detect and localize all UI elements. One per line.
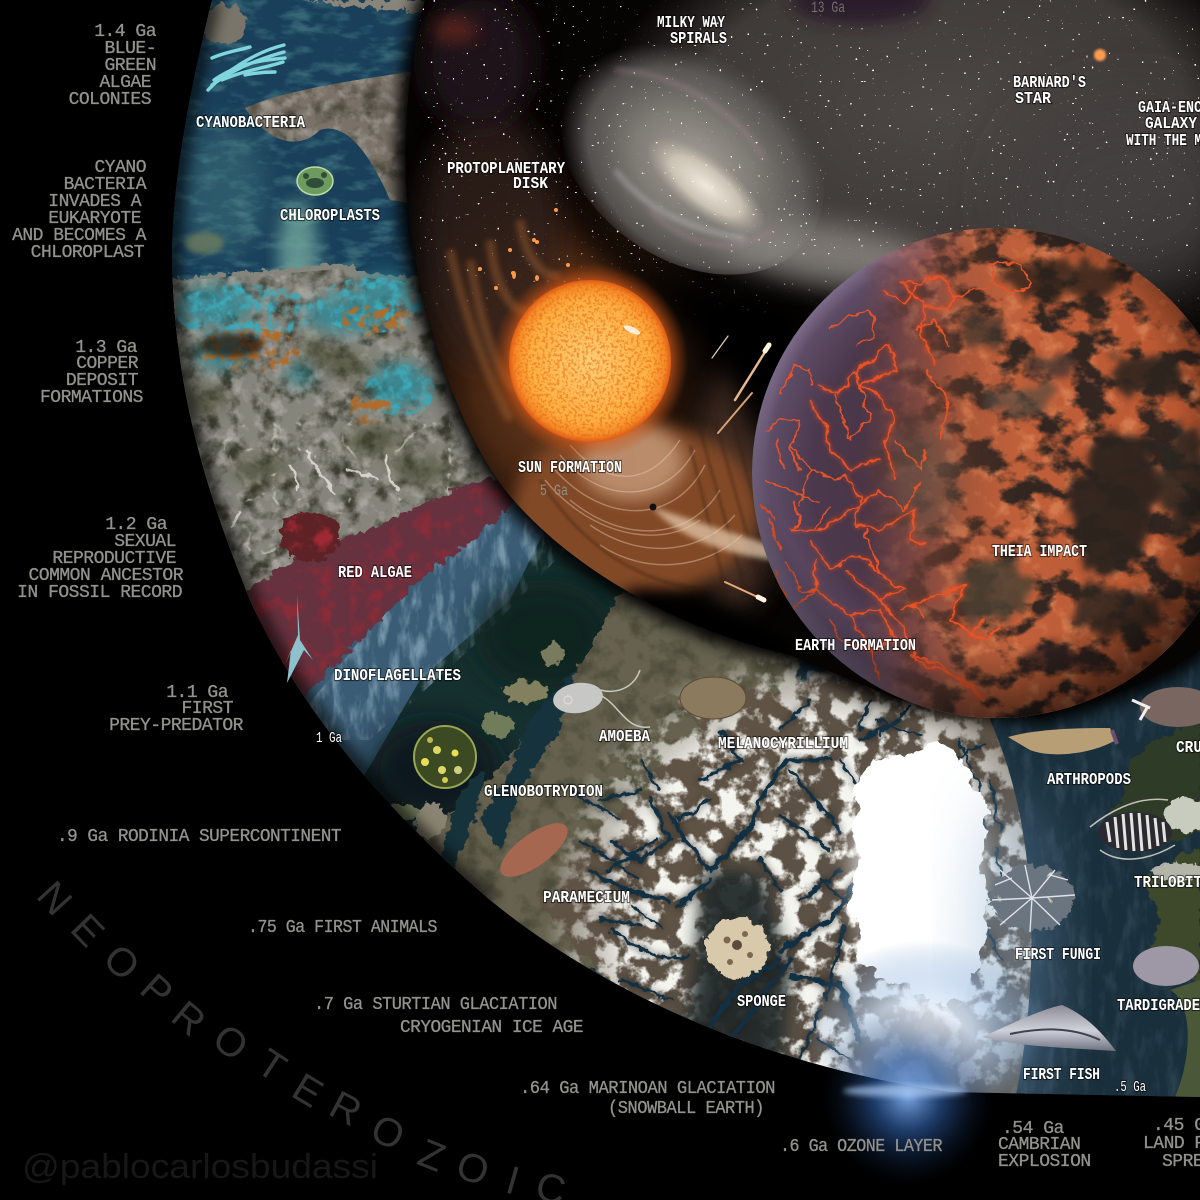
left label: sexual reproduction: 1.2 Ga <box>105 515 168 535</box>
left label: copper: COPPER <box>76 354 139 374</box>
left label: chloroplast: BACTERIA <box>64 175 147 195</box>
left label: copper: 1.3 Ga <box>75 338 138 358</box>
icon: melanocyrillium <box>680 677 746 719</box>
era title: Neoproterozoic: R <box>163 993 214 1045</box>
timeline label: Rodinia: .9 Ga RODINIA SUPERCONTINENT <box>57 827 342 847</box>
left label: prey-predator: 1.1 Ga <box>166 683 229 703</box>
left label: chloroplast: CYANO <box>94 158 146 178</box>
icon: glenobotrydion <box>414 726 476 788</box>
icon: first fungi <box>990 865 1075 932</box>
label: red algae: RED ALGAE <box>338 564 412 583</box>
terrain: tan land <box>366 590 800 970</box>
lava cracks glow <box>790 275 985 700</box>
timeline label: Marinoan glaciation: (SNOWBALL EARTH) <box>608 1099 764 1119</box>
icon: red algae <box>280 510 340 562</box>
terrain: haze <box>805 790 1052 1130</box>
icon: cyanobacteria <box>208 45 285 90</box>
timeline label: Cambrian explosion: .54 Ga <box>1002 1119 1065 1139</box>
left label: blue-green algae: GREEN <box>104 56 156 76</box>
era title: Neoproterozoic: N <box>28 873 80 924</box>
era title: Neoproterozoic <box>28 873 570 1200</box>
left label: blue-green algae: COLONIES <box>69 90 151 110</box>
dark lanes <box>568 201 774 626</box>
label: arthropods: ARTHROPODS <box>1047 771 1131 790</box>
13 Ga glow <box>790 0 930 24</box>
panel: space region <box>390 0 1200 730</box>
terrain: red algae bloom <box>246 476 514 698</box>
label: melanocyrillium: MELANOCYRILLIUM <box>718 735 848 754</box>
left label: sexual reproduction: SEXUAL <box>114 532 176 552</box>
era title: Neoproterozoic: O <box>451 1143 495 1195</box>
label: paramecium: PARAMECIUM <box>543 889 630 908</box>
era title: Neoproterozoic: P <box>132 965 181 1016</box>
timeline label: ozone layer: .6 Ga OZONE LAYER <box>780 1137 943 1157</box>
label: sponge: SPONGE <box>737 993 786 1012</box>
icon: dinoflagellate <box>285 595 313 683</box>
left label: blue-green algae: BLUE- <box>104 39 156 59</box>
label: cyanobacteria: CYANOBACTERIA <box>196 114 306 133</box>
label: Barnard's star: BARNARD'S <box>1013 74 1086 93</box>
timeline label: Sturtian glaciation: .7 Ga STURTIAN GLACIATION <box>314 995 557 1015</box>
lava surface <box>860 228 1200 718</box>
left label: prey-predator: PREY-PREDATOR <box>109 716 244 736</box>
sun <box>492 263 688 459</box>
galaxy: milky way <box>564 47 927 303</box>
era title: Neoproterozoic: T <box>249 1041 294 1091</box>
left label: sexual reproduction: IN FOSSIL RECORD <box>17 583 182 603</box>
terrain: right ocean and islands <box>990 660 1200 1100</box>
left label: chloroplast: CHLOROPLAST <box>31 243 145 263</box>
timeline label: first animals: .75 Ga FIRST ANIMALS <box>248 918 437 938</box>
left label: blue-green algae: 1.4 Ga <box>94 22 157 42</box>
watermark: @pablocarlosbudassi <box>22 1148 378 1186</box>
timeline label: Cambrian explosion: EXPLOSION <box>998 1152 1091 1172</box>
label: chloroplasts: CHLOROPLASTS <box>280 207 380 226</box>
era title: Neoproterozoic: O <box>205 1016 256 1070</box>
label: first fish: FIRST FISH <box>1023 1066 1100 1085</box>
left label: blue-green algae: ALGAE <box>99 73 151 93</box>
lava cracks <box>762 262 1030 700</box>
terrain: teal ocean <box>294 502 621 838</box>
icon: paramecium <box>492 814 576 886</box>
left label: sexual reproduction: COMMON ANCESTOR <box>28 566 184 586</box>
terrain: copper deposits <box>172 262 520 614</box>
icon: arthropod <box>1008 728 1117 754</box>
label: sun formation: SUN FORMATION <box>518 459 622 478</box>
left label: copper: DEPOSIT <box>66 371 139 391</box>
label: protoplanetary disk: PROTOPLANETARY <box>447 160 566 179</box>
label: 5 Ga: 5 Ga <box>540 482 568 500</box>
left label: sexual reproduction: REPRODUCTIVE <box>52 549 176 569</box>
label: glenobotrydion: GLENOBOTRYDION <box>484 783 603 802</box>
era title: Neoproterozoic: Z <box>412 1131 451 1181</box>
nebula cloud <box>600 0 1200 310</box>
timeline label: Marinoan glaciation: .64 Ga MARINOAN GLACIATION <box>520 1079 775 1099</box>
left label: chloroplast: INVADES A <box>48 192 142 212</box>
sparks near sun <box>478 208 570 290</box>
era title: Neoproterozoic: O <box>364 1106 411 1159</box>
protoplanetary disk <box>400 0 777 610</box>
label: amoeba: AMOEBA <box>599 728 651 747</box>
era title: Neoproterozoic: R <box>322 1083 369 1135</box>
left label: chloroplast: EUKARYOTE <box>48 209 141 229</box>
panel: Theia impact planet <box>752 228 1200 718</box>
limb shading <box>752 228 1200 718</box>
shadow around space <box>405 0 1200 716</box>
terrain: white ice sheet <box>849 744 990 1008</box>
star field <box>420 0 1200 320</box>
terrain: cyanobacteria ocean <box>172 0 424 326</box>
label: first fungi: FIRST FUNGI <box>1015 946 1101 965</box>
era title: Neoproterozoic: E <box>285 1065 330 1117</box>
ozone glow <box>823 1005 993 1185</box>
label: 1 Ga: 1 Ga <box>316 730 342 747</box>
terrain: snowy mountains <box>530 640 1040 1100</box>
terrain edge shadow <box>172 0 490 900</box>
label: .5 Ga: .5 Ga <box>1114 1079 1146 1096</box>
left label: copper: FORMATIONS <box>40 388 143 408</box>
era title: Neoproterozoic: E <box>62 906 112 956</box>
label: dinoflagellates: DINOFLAGELLATES <box>334 667 461 686</box>
comets <box>712 336 770 600</box>
icon: chloroplast <box>297 167 333 195</box>
label: milky way spirals: SPIRALS <box>670 30 727 49</box>
timeline label: Cambrian explosion: CAMBRIAN <box>998 1135 1080 1155</box>
timeline label: Sturtian glaciation: CRYOGENIAN ICE AGE <box>400 1018 583 1038</box>
icon: amoeba <box>551 670 650 727</box>
icon: sponge <box>705 918 769 978</box>
icon: trilobite <box>1090 799 1175 859</box>
label: Barnard's star: STAR <box>1015 90 1052 109</box>
left label: chloroplast: AND BECOMES A <box>12 226 147 246</box>
label: protoplanetary disk: DISK <box>513 175 549 194</box>
label: Theia impact: THEIA IMPACT <box>992 543 1087 562</box>
label: Earth formation: EARTH FORMATION <box>795 637 916 656</box>
icon: tardigrade <box>1133 946 1199 986</box>
icon: crustacean <box>1132 687 1200 727</box>
icon: first fish <box>982 1005 1116 1051</box>
label: milky way spirals: MILKY WAY <box>657 14 726 33</box>
terrain: rivers <box>570 700 1010 1060</box>
left label: prey-predator: FIRST <box>181 699 234 719</box>
era title: Neoproterozoic: O <box>95 936 148 989</box>
